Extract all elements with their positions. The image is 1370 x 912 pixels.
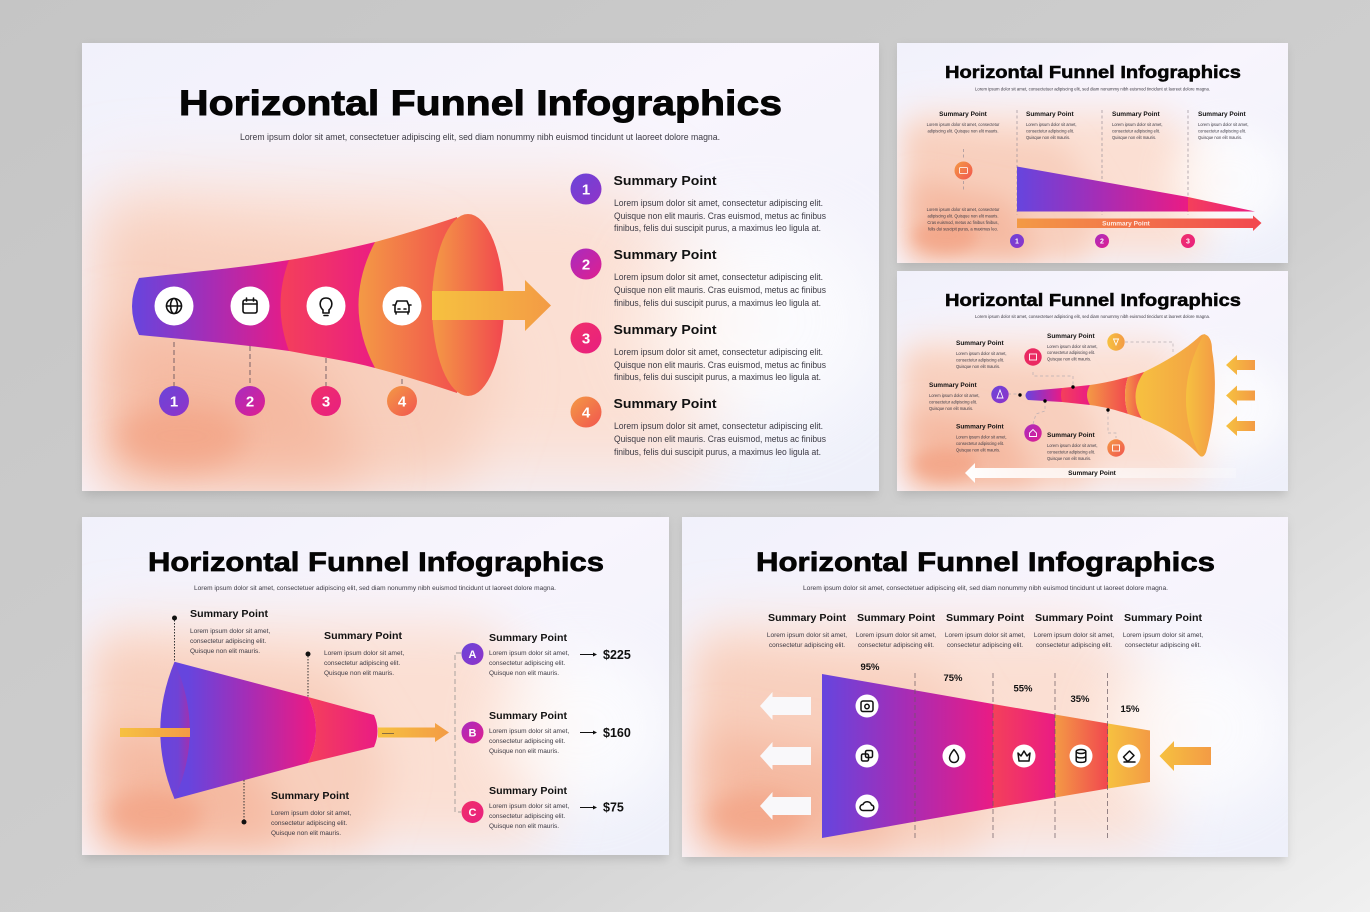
column descriptions: consectetur adipiscing elit. xyxy=(1125,642,1201,649)
numbered markers: 3 xyxy=(1186,238,1190,246)
lettered options: Summary Point xyxy=(489,710,567,722)
column descriptions: consectetur adipiscing elit. xyxy=(1036,642,1112,649)
summary list: 4 xyxy=(582,404,591,422)
text blocks: Quisque non elit mauris. xyxy=(1047,356,1091,362)
icon: orange folder xyxy=(954,162,972,180)
left paragraph xyxy=(927,207,1000,232)
bell funnel xyxy=(1026,334,1215,457)
column descriptions: consectetur adipiscing elit. xyxy=(858,642,934,649)
dotted leaders xyxy=(172,616,310,824)
output arrow xyxy=(378,723,449,742)
column descriptions xyxy=(767,632,1203,649)
numbered markers: 1 xyxy=(1015,238,1019,246)
summary list xyxy=(570,173,826,457)
arrow out of funnel xyxy=(432,280,551,331)
lettered options: Quisque non elit mauris. xyxy=(489,748,559,755)
column descriptions: Lorem ipsum dolor sit amet, xyxy=(767,632,847,639)
text blocks: consectetur adipiscing elit. xyxy=(956,358,1004,362)
triangle funnel xyxy=(1017,166,1255,212)
column texts: Quisque non elit mauris. xyxy=(1026,135,1070,140)
prices: $160 xyxy=(603,726,631,740)
text blocks left: Quisque non elit mauris. xyxy=(190,648,260,655)
input arrows xyxy=(1226,355,1255,436)
column descriptions: Lorem ipsum dolor sit amet, xyxy=(856,632,936,639)
numbered circles under funnel: 3 xyxy=(322,394,330,410)
text blocks: Summary Point xyxy=(1047,333,1096,340)
column texts: Quisque non elit mauris. xyxy=(1112,135,1156,140)
summary list: Lorem ipsum dolor sit amet, consectetur adipiscing elit. xyxy=(614,421,823,431)
percent labels: 15% xyxy=(1120,704,1140,715)
icon circles xyxy=(154,286,422,326)
lettered options: Lorem ipsum dolor sit amet, xyxy=(489,728,569,735)
icon: cloud xyxy=(860,802,874,810)
summary list: Summary Point xyxy=(614,396,717,411)
summary list: Quisque non elit mauris. Cras euismod, metus ac finibus xyxy=(614,285,826,295)
title: Horizontal Funnel Infographics xyxy=(756,547,1215,577)
column texts: Summary Point xyxy=(1026,111,1075,118)
summary list: Quisque non elit mauris. Cras euismod, metus ac finibus xyxy=(614,360,826,370)
lettered options: B xyxy=(469,728,477,740)
text blocks: Quisque non elit mauris. xyxy=(929,406,973,411)
white arrows xyxy=(760,692,811,820)
icon: database xyxy=(1076,750,1086,762)
column texts: Lorem ipsum dolor sit amet, xyxy=(1198,122,1249,127)
text blocks left: Summary Point xyxy=(324,630,402,642)
percent labels xyxy=(860,662,1140,715)
text blocks: Lorem ipsum dolor sit amet, xyxy=(1047,344,1098,349)
panel: bell funnel slide xyxy=(897,271,1288,491)
price arrows xyxy=(580,652,597,810)
summary list: Summary Point xyxy=(614,247,717,262)
dashed connectors xyxy=(174,342,402,386)
summary arrow xyxy=(1017,216,1262,231)
summary list: Summary Point xyxy=(614,322,717,337)
column texts: Lorem ipsum dolor sit amet, xyxy=(1112,122,1163,127)
column headings: Summary Point xyxy=(946,612,1024,624)
lettered options: Lorem ipsum dolor sit amet, xyxy=(489,803,569,810)
prices: $75 xyxy=(603,800,624,814)
cone funnel xyxy=(160,662,378,799)
summary list: 1 xyxy=(582,182,590,198)
lettered options: Quisque non elit mauris. xyxy=(489,670,559,677)
text blocks left: Quisque non elit mauris. xyxy=(324,670,394,677)
text blocks: Quisque non elit mauris. xyxy=(1047,456,1091,461)
percent labels: 35% xyxy=(1070,694,1090,705)
funnel chart xyxy=(132,214,504,396)
numbered circles under funnel: 2 xyxy=(246,394,254,410)
panel: stepped funnel slide xyxy=(682,517,1288,857)
summary list: Quisque non elit mauris. Cras euismod, metus ac finibus xyxy=(614,211,826,221)
text blocks left xyxy=(190,608,404,837)
column texts: Summary Point xyxy=(1112,111,1161,118)
column texts: Lorem ipsum dolor sit amet, consectetur xyxy=(927,122,1000,127)
text blocks: Summary Point xyxy=(956,340,1005,347)
column headings: Summary Point xyxy=(1035,612,1113,624)
text blocks left: consectetur adipiscing elit. xyxy=(271,820,347,827)
column headings: Summary Point xyxy=(768,612,846,624)
percent labels: 75% xyxy=(943,673,963,684)
column texts: consectetur adipiscing elit. xyxy=(1112,128,1160,134)
input bar xyxy=(120,728,190,737)
title: Horizontal Funnel Infographics xyxy=(945,62,1241,82)
text blocks: consectetur adipiscing elit. xyxy=(929,400,977,404)
lettered options: consectetur adipiscing elit. xyxy=(489,660,565,667)
column texts: Lorem ipsum dolor sit amet, xyxy=(1026,122,1077,127)
numbered circles under funnel: 1 xyxy=(170,394,178,410)
lettered options: Summary Point xyxy=(489,785,567,797)
numbered circles under funnel: 4 xyxy=(398,394,407,410)
lettered options: Lorem ipsum dolor sit amet, xyxy=(489,650,569,657)
text blocks: consectetur adipiscing elit. xyxy=(1047,450,1095,454)
text blocks left: Quisque non elit mauris. xyxy=(271,830,341,837)
dashed bracket xyxy=(455,653,461,812)
subtitle: Lorem ipsum dolor sit amet, consectetuer adipiscing elit, sed diam nonummy nibh euismod tincidunt ut laoreet dolore magna. xyxy=(803,585,1168,592)
text blocks: consectetur adipiscing elit. xyxy=(1047,350,1095,355)
summary list: 2 xyxy=(582,256,590,274)
text blocks left: consectetur adipiscing elit. xyxy=(190,638,266,645)
column texts: adipiscing elit. Quisque non elit mauris. xyxy=(928,128,998,134)
icon circles xyxy=(991,333,1125,457)
text blocks: Quisque non elit mauris. xyxy=(956,364,1000,369)
column headings: Summary Point xyxy=(1124,612,1202,624)
percent labels: 55% xyxy=(1013,684,1033,694)
white summary arrow: Summary Point xyxy=(1068,470,1117,477)
text blocks: Quisque non elit mauris. xyxy=(956,448,1000,452)
summary list: Lorem ipsum dolor sit amet, consectetur adipiscing elit. xyxy=(614,347,823,357)
lettered options: Quisque non elit mauris. xyxy=(489,823,559,830)
icon: drop xyxy=(950,750,958,762)
panel: main funnel slide xyxy=(82,43,879,491)
column texts xyxy=(927,111,1249,140)
dashed dividers xyxy=(964,110,1188,215)
text blocks: Lorem ipsum dolor sit amet, xyxy=(956,434,1007,440)
text blocks xyxy=(929,333,1098,461)
summary list: Lorem ipsum dolor sit amet, consectetur adipiscing elit. xyxy=(614,198,823,208)
text blocks: Summary Point xyxy=(1047,432,1096,439)
text blocks: Lorem ipsum dolor sit amet, xyxy=(1047,443,1098,448)
column texts: consectetur adipiscing elit. xyxy=(1026,128,1074,134)
summary list: Quisque non elit mauris. Cras euismod, metus ac finibus xyxy=(614,434,826,444)
dashed dividers xyxy=(915,673,1108,838)
panel: cone funnel slide xyxy=(82,517,669,855)
icon: camera xyxy=(861,701,873,712)
subtitle: Lorem ipsum dolor sit amet, consectetuer adipiscing elit, sed diam nonummy nibh euismod tincidunt ut laoreet dolore magna. xyxy=(975,314,1210,319)
column headings: Summary Point xyxy=(857,612,935,624)
numbered markers xyxy=(1010,234,1195,248)
percent labels: 95% xyxy=(860,662,880,673)
summary list: finibus, felis dui suscipit purus, a maximus leo ligula at. xyxy=(614,298,821,308)
text blocks: Lorem ipsum dolor sit amet, xyxy=(956,351,1007,356)
text blocks: consectetur adipiscing elit. xyxy=(956,441,1004,446)
column texts: consectetur adipiscing elit. xyxy=(1198,128,1246,134)
text blocks left: Lorem ipsum dolor sit amet, xyxy=(324,650,404,657)
numbered circles under funnel xyxy=(159,386,417,416)
icon: car xyxy=(393,301,411,314)
panel: triangle funnel slide xyxy=(897,43,1288,263)
left paragraph: felis dui suscipit purus, a maximus leo. xyxy=(928,226,998,232)
text blocks left: consectetur adipiscing elit. xyxy=(324,660,400,667)
text blocks left: Lorem ipsum dolor sit amet, xyxy=(190,628,270,635)
orange input arrow xyxy=(1160,741,1211,771)
lettered options: C xyxy=(469,807,477,819)
lettered options xyxy=(462,632,569,830)
white summary arrow xyxy=(965,463,1236,483)
title: Horizontal Funnel Infographics xyxy=(179,83,782,123)
icon circles xyxy=(856,694,1140,818)
dotted leaders xyxy=(1008,342,1173,438)
numbered markers: 2 xyxy=(1100,238,1104,246)
lettered options: consectetur adipiscing elit. xyxy=(489,813,565,820)
lettered options: A xyxy=(469,649,477,661)
column texts: Summary Point xyxy=(939,111,988,118)
left paragraph: adipiscing elit. Quisque non elit mauris. xyxy=(928,214,998,218)
column descriptions: consectetur adipiscing elit. xyxy=(769,642,845,649)
icon: copy xyxy=(862,750,872,761)
summary arrow: Summary Point xyxy=(1102,220,1151,228)
summary list: finibus, felis dui suscipit purus, a maximus leo ligula at. xyxy=(614,372,821,382)
summary list: 3 xyxy=(582,330,590,348)
text blocks left: Summary Point xyxy=(271,790,349,802)
lettered options: Summary Point xyxy=(489,632,567,644)
icon: bulb xyxy=(320,298,332,316)
column descriptions: Lorem ipsum dolor sit amet, xyxy=(1123,632,1203,639)
summary list: Summary Point xyxy=(614,173,717,188)
summary list: finibus, felis dui suscipit purus, a maximus leo ligula at. xyxy=(614,223,821,233)
subtitle: Lorem ipsum dolor sit amet, consectetuer adipiscing elit, sed diam nonummy nibh euismod tincidunt ut laoreet dolore magna. xyxy=(975,86,1210,92)
stepped funnel chart xyxy=(822,674,1150,838)
column descriptions: Lorem ipsum dolor sit amet, xyxy=(1034,632,1114,639)
icon: calendar xyxy=(243,298,257,313)
slide shadows xyxy=(84,47,1286,861)
black dots xyxy=(1018,385,1110,412)
lettered options: consectetur adipiscing elit. xyxy=(489,738,565,745)
column texts: Quisque non elit mauris. xyxy=(1198,135,1242,140)
icon: eraser xyxy=(1124,751,1135,762)
column descriptions: Lorem ipsum dolor sit amet, xyxy=(945,632,1025,639)
text blocks: Summary Point xyxy=(956,424,1005,430)
text blocks: Lorem ipsum dolor sit amet, xyxy=(929,393,980,398)
prices xyxy=(603,648,631,814)
icon: crown xyxy=(1018,751,1030,761)
column headings xyxy=(768,612,1202,624)
text blocks left: Summary Point xyxy=(190,608,268,620)
text blocks: Summary Point xyxy=(929,382,978,389)
summary list: Lorem ipsum dolor sit amet, consectetur adipiscing elit. xyxy=(614,272,823,282)
left paragraph: Lorem ipsum dolor sit amet, consectetur xyxy=(927,207,1000,212)
text blocks left: Lorem ipsum dolor sit amet, xyxy=(271,810,351,817)
summary list: finibus, felis dui suscipit purus, a maximus leo ligula at. xyxy=(614,447,821,457)
subtitle: Lorem ipsum dolor sit amet, consectetuer adipiscing elit, sed diam nonummy nibh euismod tincidunt ut laoreet dolore magna. xyxy=(194,585,556,592)
column texts: Summary Point xyxy=(1198,111,1247,118)
icon: globe xyxy=(166,298,182,314)
left paragraph: Cras euismod, metus ac finibus finibus, xyxy=(927,220,999,225)
title: Horizontal Funnel Infographics xyxy=(945,290,1241,310)
title: Horizontal Funnel Infographics xyxy=(148,547,604,577)
prices: $225 xyxy=(603,648,631,662)
column descriptions: consectetur adipiscing elit. xyxy=(947,642,1023,649)
subtitle: Lorem ipsum dolor sit amet, consectetuer adipiscing elit, sed diam nonummy nibh euismod tincidunt ut laoreet dolore magna. xyxy=(240,132,720,142)
